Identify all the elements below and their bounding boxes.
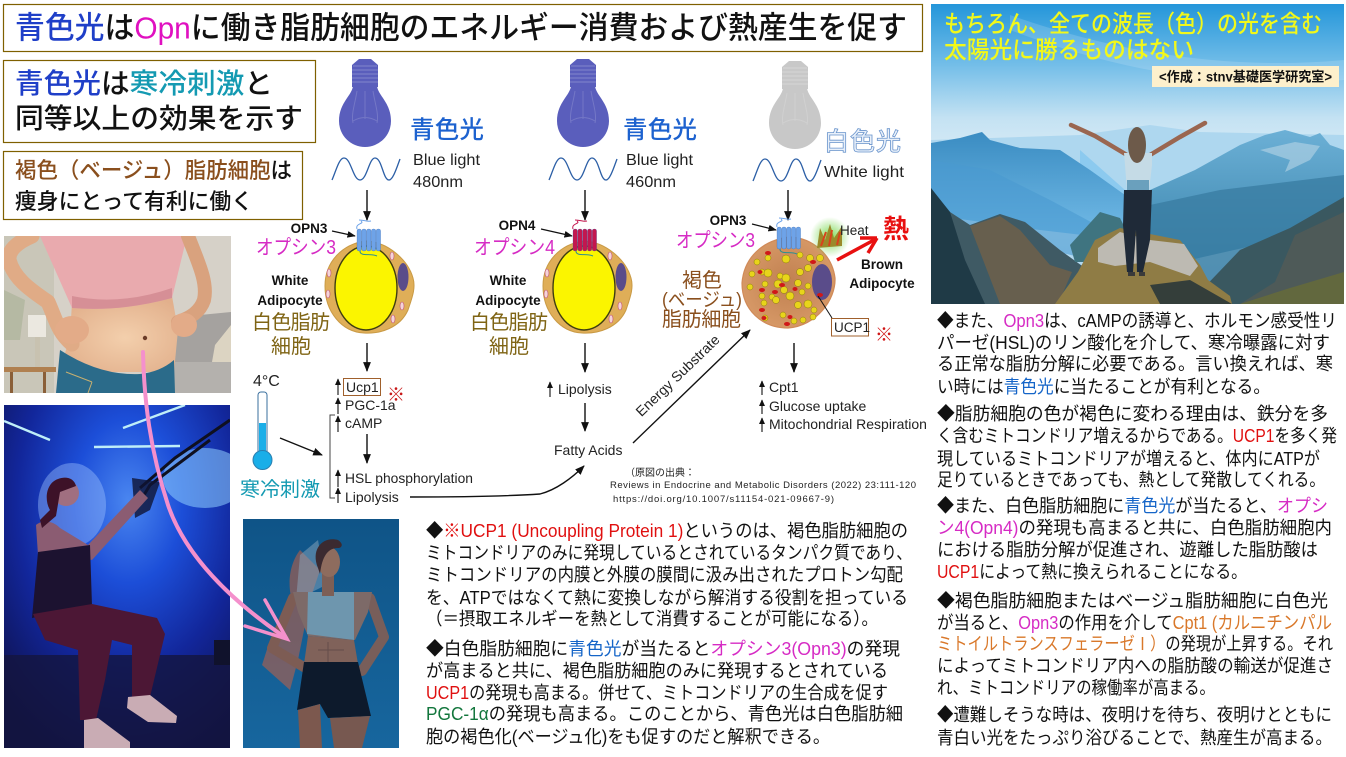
icon: wave 2 [549,158,617,180]
text block: blue light on white adipocytes: が高まると共に、褐色脂肪細胞のみに発現するとされている [426,661,888,681]
text block: UCP1 explanation: ◆※UCP1 (Uncoupling Protein 1)というのは、褐色脂肪細胞の [426,521,908,541]
text block: Cpt1 and white light [937,591,1333,698]
mountain photo caption [944,11,1322,64]
text block: why fat turns brown: ◆脂肪細胞の色が褐色に変わる理由は、鉄分を多 [937,404,1328,424]
icon: blue bulb 480nm [339,59,391,147]
text block: blue light on white adipocytes: PGC-1αの発現も高まる。このことから、青色光は白色脂肪細 [426,704,903,724]
text block: blue light on white adipocytes: ◆白色脂肪細胞に青色光が当たるとオプシン3(Opn3)の発現 [426,639,900,659]
mountain photo caption: 太陽光に勝るものはない [944,37,1194,64]
icon: wave 3 [753,159,821,181]
brown adipocyte with OPN3 and heat: Heat [840,223,869,238]
text: blue light 460nm: 460nm [626,174,676,191]
text block: blue light and Opn4: ◆また、白色脂肪細胞に青色光が当たると、オプシ [937,496,1328,516]
callout: beige adipocytes help weight loss: 褐色（ベージュ）脂肪細胞は [15,158,292,183]
citation: https://doi.org/10.1007/s11154-021-09667-9) [613,494,834,505]
text block: UCP1 explanation: ミトコンドリアのみに発現しているとされているタンパク質であり、 [426,543,912,563]
text block: blue light and Opn4: における脂肪分解が促進され、遊離した脂肪酸は [937,540,1318,560]
text block: blue light on white adipocytes [426,639,903,747]
text block: blue light and Opn4: UCP1によって熱に換えられることになる。 [937,562,1247,582]
text block: why fat turns brown [937,404,1337,490]
text block: why fat turns brown: く含むミトコンドリア増えるからである。UCP1を多く発 [937,426,1337,446]
diagram: lipid metabolism pathways [240,59,927,505]
white adipocyte 1 with OPN3: White [272,273,309,288]
white adipocyte 2 downstream: Lipolysis [558,381,612,397]
brown adipocyte with OPN3 and heat: ※ [875,325,893,345]
white adipocyte 1 downstream pathway: Lipolysis [345,489,399,505]
photo: belly [4,236,231,393]
citation: （原図の出典： [625,466,695,479]
brown adipocyte with OPN3 and heat: (ベージュ) [662,290,742,311]
white adipocyte 2 with OPN4: Adipocyte [475,293,541,308]
callout: blue light equals cold stimulus [4,60,316,142]
white adipocyte 2 with OPN4 [470,218,632,358]
white adipocyte 1 downstream pathway: cAMP [345,415,382,431]
brown adipocyte downstream results: Glucose uptake [769,398,866,414]
text: blue light 460nm: Blue light [626,152,694,169]
brown adipocyte with OPN3 and heat: 脂肪細胞 [662,308,741,331]
white adipocyte 1 with OPN3 [252,220,414,358]
label: white light: 白色光 [824,128,901,156]
text block: Opn3 and lipolysis: パーゼ(HSL)のリン酸化を介して、寒冷曝露に対す [937,333,1330,353]
arrows: light down to cells [367,190,788,220]
callout: blue light equals cold stimulus: 青色光は寒冷刺激と [15,68,273,99]
brown adipocyte with OPN3 and heat: OPN3 [710,213,747,228]
text: blue light 480nm: 480nm [413,174,463,191]
icon: blue bulb 460nm [557,59,609,147]
text: blue light 480nm [413,154,480,187]
text block: Cpt1 and white light: ◆褐色脂肪細胞またはベージュ脂肪細胞に白色光 [937,591,1328,611]
text block: UCP1 explanation [426,521,912,629]
text block: Cpt1 and white light: れ、ミトコンドリアの稼働率が高まる。 [937,678,1215,698]
brown adipocyte with OPN3 and heat: Adipocyte [849,276,915,291]
white adipocyte 1 downstream pathway: HSL phosphorylation [345,470,473,486]
white adipocyte 1 downstream pathway: ※ [387,385,405,405]
text block: Opn3 and lipolysis [937,311,1337,397]
text block: UCP1 explanation: （＝摂取エネルギーを熱として消費することが可能になる）。 [426,609,878,629]
white adipocyte 2 with OPN4: 白色脂肪 [470,311,548,334]
photo: fit woman [243,519,399,748]
text block: Cpt1 and white light: が当ると、Opn3の作用を介してCpt1 (カルニチンパル [937,613,1332,633]
white adipocyte 2 with OPN4: オプシン4 [474,237,555,259]
arrow: energy substrate [632,330,750,443]
brown adipocyte with OPN3 and heat [662,213,915,345]
arrow: lipolysis to fatty acids [410,466,584,497]
icon: thermometer 4 degrees: 4°C [253,373,280,390]
text block: UCP1 explanation: を、ATPではなくて熱に変換しながら解消する役割を担っている [426,588,908,608]
text block: blue light on white adipocytes: 胞の褐色化(ベージュ化)をも促すのだと解釈できる。 [426,727,830,747]
arrow: pink transformation arrow [143,352,287,639]
callout: blue light equals cold stimulus: 同等以上の効果を示す [15,103,303,134]
photo: mountain top with raised arms [931,4,1344,304]
label: blue light 460: 青色光 [623,116,697,144]
author tag: <作成：stnv基礎医学研究室> [1159,68,1332,84]
brown adipocyte downstream results [762,343,927,432]
title banner: 青色光はOpnに働き脂肪細胞のエネルギー消費および熱産生を促す [15,10,907,46]
white adipocyte 1 with OPN3: オプシン3 [256,237,336,259]
photo: gym workout in blue light [4,405,247,748]
callout: beige adipocytes help weight loss [4,152,302,220]
citation [610,466,916,505]
brown adipocyte downstream results: Mitochondrial Respiration [769,416,927,432]
text: white light english: White light [824,164,905,181]
brown adipocyte with OPN3 and heat: 熱 [883,214,909,244]
author tag [1152,66,1339,87]
white adipocyte 2 downstream [550,343,622,458]
white adipocyte 1 with OPN3: Adipocyte [257,293,323,308]
brown adipocyte with OPN3 and heat: 褐色 [682,269,722,292]
icon: wave 1 [332,158,400,180]
white adipocyte 2 with OPN4: 細胞 [489,335,529,358]
brown adipocyte with OPN3 and heat: オプシン3 [676,230,755,252]
text: blue light 480nm: Blue light [413,152,481,169]
text block: Opn3 and lipolysis: い時には青色光に当たることが有利となる。 [937,377,1270,397]
white adipocyte 1 with OPN3: 細胞 [271,335,311,358]
callout: beige adipocytes help weight loss: 痩身にとって有利に働く [15,189,253,214]
arrow: energy substrate: Energy Substrate [632,331,723,419]
white adipocyte 2 with OPN4: OPN4 [499,218,536,233]
citation: Reviews in Endocrine and Metabolic Disorders (2022) 23:111-120 [610,480,916,491]
text block: blue light and Opn4: ン4(Opn4)の発現も高まると共に、白色脂肪細胞内 [937,518,1332,538]
text block: Opn3 and lipolysis: る正常な脂肪分解に必要である。言い換えれば、寒 [937,354,1333,374]
white adipocyte 1 with OPN3: OPN3 [291,221,328,236]
text: blue light 460nm [626,154,693,187]
text block: dawn light advice [937,705,1332,748]
arrow: cold to pathway [280,438,322,455]
brown adipocyte with OPN3 and heat: UCP1 [834,320,870,335]
icon: white bulb [769,61,821,149]
icon: thermometer 4 degrees [253,373,280,470]
white adipocyte 2 downstream: Fatty Acids [554,442,622,458]
brown adipocyte downstream results: Cpt1 [769,379,799,395]
text block: blue light and Opn4 [937,496,1332,582]
text block: UCP1 explanation: ミトコンドリアの内膜と外膜の膜間に汲み出されたプロトン勾配 [426,565,903,585]
brown adipocyte with OPN3 and heat: Brown [861,257,903,272]
white adipocyte 1 with OPN3: 白色脂肪 [252,311,330,334]
label: blue light 480: 青色光 [410,116,484,144]
white adipocyte 2 with OPN4: White [490,273,527,288]
label: cold stimulus: 寒冷刺激 [240,478,320,501]
white adipocyte 1 downstream pathway: Ucp1 [346,379,379,395]
white adipocyte 1 downstream pathway: PGC-1a [345,397,396,413]
text block: blue light on white adipocytes: UCP1の発現も高まる。併せて、ミトコンドリアの生合成を促す [426,683,888,703]
white adipocyte 1 downstream pathway [330,343,473,505]
